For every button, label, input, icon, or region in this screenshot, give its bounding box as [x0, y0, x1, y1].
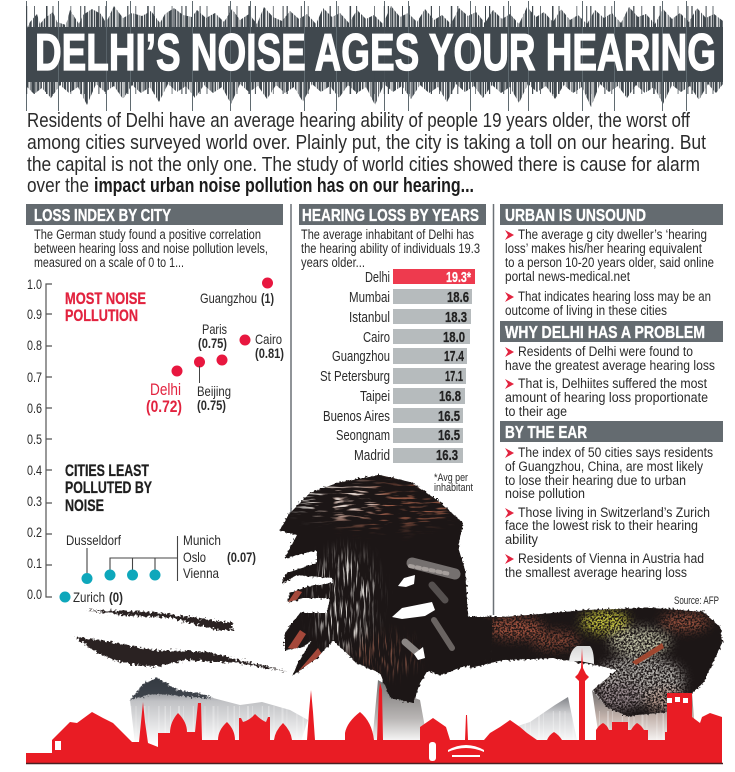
bullet: proportionate to age: amount of hearing loss proportionate: [505, 390, 708, 406]
footnote: inhabitant: [434, 482, 473, 494]
bar chart: Seongnam: [336, 428, 390, 444]
city labels: least polluted: [66, 532, 256, 605]
bullet: greatest hearing loss: [505, 344, 715, 374]
bullet: Zurich: Those living in Switzerland’s Zurich: [518, 505, 710, 521]
label: cities least polluted: [65, 461, 152, 515]
intro text: impact urban noise pollution has on our hearing...: [94, 174, 474, 197]
city labels: most polluted: (0.72): [146, 397, 182, 416]
label: most noise pollution: [65, 289, 146, 325]
bullet: proportionate to age: That is, Delhiites suffered the most: [518, 376, 707, 392]
city labels: least polluted: Munich: [183, 532, 221, 548]
city labels: least polluted: Vienna: [183, 565, 219, 581]
bar chart: Cairo: [363, 330, 390, 346]
intro text: over the: [27, 174, 89, 197]
bar chart: St Petersburg: [320, 369, 390, 385]
intro: hearing loss: [301, 227, 480, 271]
chart axis: 1.0: [27, 277, 42, 292]
bar chart: Guangzhou: [332, 349, 390, 365]
bar chart: 18.3: [445, 309, 467, 326]
chart axis: 0.3: [27, 494, 42, 509]
label: most noise pollution: POLLUTION: [65, 306, 138, 325]
haze behind tower: [569, 646, 594, 664]
chart axis: 0.6: [27, 401, 42, 416]
bullet: proportionate to age: to their age: [505, 404, 567, 420]
gaps between fingers: [392, 575, 435, 660]
bullet: index of 50 cities: of Guangzhou, China, are most likely: [505, 459, 704, 475]
city labels: most polluted: Guangzhou: [200, 290, 257, 306]
bullet: outcome of living: [505, 289, 711, 319]
bullet: average city dweller: portal news-medical.net: [505, 269, 630, 285]
city labels: least polluted: (0.07): [227, 549, 256, 565]
city labels: most polluted: Paris: [202, 321, 227, 337]
bar chart: [320, 269, 475, 464]
bar chart: 19.3*: [446, 269, 471, 286]
footnote: [434, 472, 473, 494]
connector lines: least polluted: [87, 536, 178, 581]
bullet: index of 50 cities: [505, 445, 713, 502]
bar chart: 18.0: [443, 329, 465, 346]
grey hand fingers: [405, 563, 455, 655]
chart axis: 0.8: [27, 338, 42, 353]
source note: Source: AFP: [674, 595, 719, 607]
label: most noise pollution: MOST NOISE: [65, 289, 146, 308]
heading: by the ear: BY THE EAR: [505, 422, 587, 442]
panel: by the ear: [500, 421, 723, 581]
heading: by the ear: [500, 421, 723, 442]
bar chart: Istanbul: [349, 310, 390, 326]
bullet: index of 50 cities: to lose their hearing due to urban: [505, 473, 686, 489]
heading: loss index by city: LOSS INDEX BY CITY: [34, 205, 171, 225]
bar chart: 16.5: [438, 408, 460, 425]
city labels: least polluted: Zurich: [73, 589, 105, 605]
city labels: most polluted: Beijing: [197, 383, 231, 399]
skyline: [26, 648, 722, 763]
bullet: greatest hearing loss: Residents of Delhi were found to: [518, 344, 693, 360]
column dividers: [291, 204, 494, 615]
city labels: most polluted: [146, 290, 284, 416]
bullet: Zurich: ability: [505, 532, 539, 548]
bullet: Vienna: [505, 551, 704, 581]
intro: loss index: The German study found a positive correlation: [34, 227, 261, 243]
bullet: outcome of living: outcome of living in these cities: [505, 303, 667, 319]
panel: hearing loss by years: [299, 204, 486, 494]
teal city points: [60, 570, 160, 602]
chart axis: 0.4: [27, 463, 42, 478]
illustration: man clutching his head over the Delhi skyline: [26, 475, 723, 764]
city labels: most polluted: Cairo: [255, 331, 282, 347]
chart axis: 0.7: [27, 370, 42, 385]
heading: loss index by city: [26, 204, 283, 225]
city labels: most polluted: (1): [261, 290, 274, 306]
forearm colour mottling: [487, 610, 709, 712]
chart axis: 0.0: [27, 587, 42, 602]
red city points: [172, 278, 273, 376]
bullet: proportionate to age: [505, 376, 708, 420]
bullet: Vienna: the smallest average hearing loss: [505, 565, 687, 581]
bullet: Vienna: Residents of Vienna in Austria had: [518, 551, 704, 567]
intro: loss index: [34, 227, 268, 271]
bar chart: 17.4: [444, 348, 464, 365]
panel: why Delhi has a problem: [500, 321, 723, 420]
bar chart: Madrid: [354, 448, 390, 464]
intro: hearing loss: years older...: [301, 255, 365, 271]
intro: hearing loss: the hearing ability of individuals 19.3: [301, 241, 480, 257]
bar chart: 17.1: [445, 368, 463, 385]
bar chart: 16.3: [436, 447, 458, 464]
chart axis: [27, 277, 52, 602]
waveform banner: [26, 6, 723, 107]
intro: loss index: between hearing loss and noise pollution levels,: [34, 241, 268, 257]
heading: urban is unsound: URBAN IS UNSOUND: [505, 205, 646, 225]
city labels: most polluted: (0.75): [197, 397, 226, 413]
intro text: [27, 109, 706, 197]
bar chart: Buenos Aires: [323, 409, 390, 425]
hair texture: [288, 483, 455, 674]
chart axis: 0.2: [27, 525, 42, 540]
bullet: Zurich: [505, 505, 710, 548]
bar chart: Mumbai: [349, 290, 390, 306]
chart axis: 0.1: [27, 556, 42, 571]
panel: loss index by city: [26, 204, 284, 605]
label: cities least polluted: NOISE: [65, 496, 104, 515]
city labels: least polluted: Dusseldorf: [66, 532, 121, 548]
intro: loss index: measured on a scale of 0 to 1...: [34, 255, 184, 271]
heading: hearing loss by years: HEARING LOSS BY YEARS: [302, 205, 479, 225]
bullet: Zurich: face the lowest risk to their hearing: [505, 518, 698, 534]
label: cities least polluted: CITIES LEAST: [65, 461, 149, 480]
chart axis: 0.5: [27, 432, 42, 447]
shoulder shading: [131, 678, 213, 700]
footnote: *Avg per: [434, 472, 468, 484]
head and hair: [280, 475, 492, 703]
bullet: index of 50 cities: noise pollution: [505, 486, 585, 502]
bar chart: Delhi: [365, 270, 390, 286]
smears fading above skyline: [130, 678, 695, 745]
city labels: most polluted: (0.75): [198, 335, 227, 351]
city labels: most polluted: (0.81): [255, 345, 284, 361]
bar chart: 16.5: [438, 427, 460, 444]
intro: hearing loss: The average inhabitant of Delhi has: [301, 227, 474, 243]
bar chart: 18.6: [447, 289, 469, 306]
forearm: [468, 608, 722, 716]
skyline details: [55, 697, 688, 761]
city labels: most polluted: Delhi: [150, 380, 181, 399]
city labels: least polluted: Oslo: [183, 549, 206, 565]
bullet: average city dweller: [505, 227, 714, 285]
bar chart: Taipei: [360, 389, 390, 405]
label: cities least polluted: POLLUTED BY: [65, 478, 152, 497]
bar chart: 16.8: [439, 388, 461, 405]
panel: urban is unsound: [500, 204, 723, 319]
chart axis: 0.9: [27, 307, 42, 322]
city labels: least polluted: (0): [109, 589, 123, 605]
sleeve strokes: [75, 610, 288, 672]
